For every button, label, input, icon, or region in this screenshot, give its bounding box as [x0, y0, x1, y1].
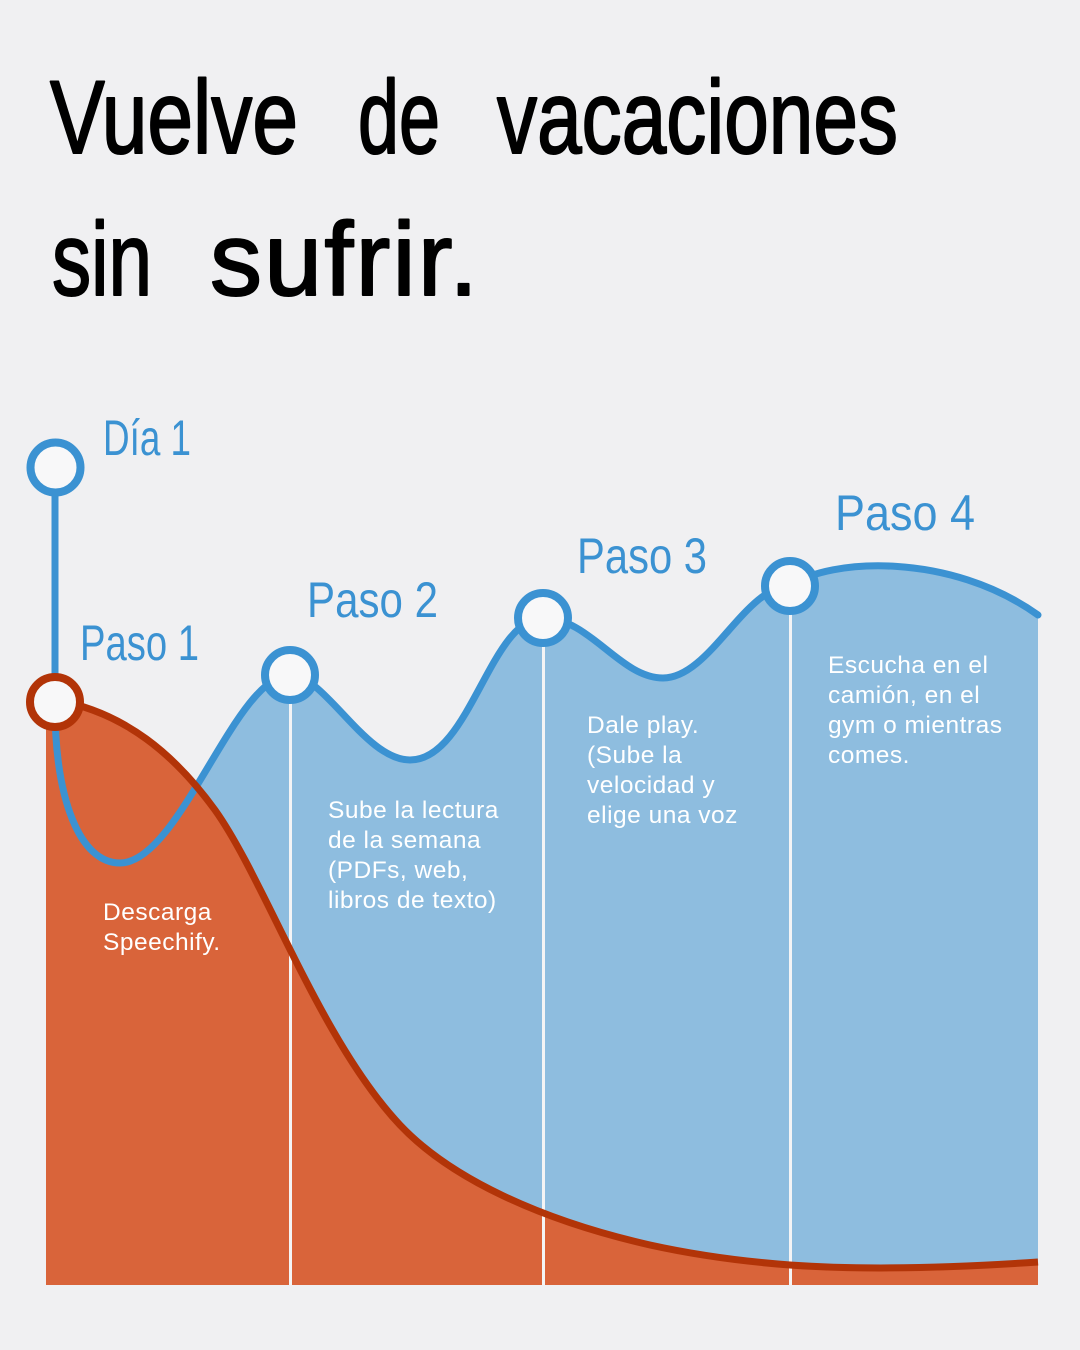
label: Día 1: Día 1	[103, 410, 191, 466]
text: step 3 description: velocidad y	[587, 772, 715, 799]
title: sin	[52, 202, 152, 318]
marker: Paso 4	[765, 561, 815, 611]
label: Paso 2: Paso 2	[307, 572, 438, 628]
chart: blue and red area curves	[46, 467, 1038, 1285]
text: step 4 description: comes.	[828, 742, 910, 769]
text: step 2 description: (PDFs, web,	[328, 857, 468, 884]
label: Paso 3: Paso 3	[577, 528, 707, 584]
title: Vuelve	[50, 60, 298, 176]
marker: Paso 3	[518, 593, 568, 643]
text: step 3 description: elige una voz	[587, 802, 738, 829]
marker: Paso 2	[265, 650, 315, 700]
text: step 3 description: (Sube la	[587, 742, 682, 769]
text: step 1 description: Descarga	[103, 899, 212, 926]
text: step 4 description: Escucha en el	[828, 652, 988, 679]
blue line	[55, 467, 1038, 863]
title: sufrir.	[210, 202, 478, 318]
marker: Paso 1	[30, 677, 80, 727]
text: step 1 description: Speechify.	[103, 929, 221, 956]
text: step 2 description: libros de texto)	[328, 887, 497, 914]
title: vacaciones	[497, 60, 898, 176]
text: step 4 description: camión, en el	[828, 682, 980, 709]
red line	[55, 700, 1038, 1268]
red area	[46, 700, 1038, 1285]
text: step 4 description: gym o mientras	[828, 712, 1002, 739]
blue area	[46, 566, 1038, 1285]
text: step 2 description: de la semana	[328, 827, 481, 854]
text: step 3 description: Dale play.	[587, 712, 699, 739]
title	[50, 60, 898, 318]
label: Paso 4: Paso 4	[835, 485, 975, 541]
label: Paso 1: Paso 1	[80, 615, 199, 671]
text: step 2 description: Sube la lectura	[328, 797, 499, 824]
marker: Día 1	[30, 442, 80, 492]
step dividers	[290, 586, 790, 1285]
title: de	[358, 60, 440, 176]
